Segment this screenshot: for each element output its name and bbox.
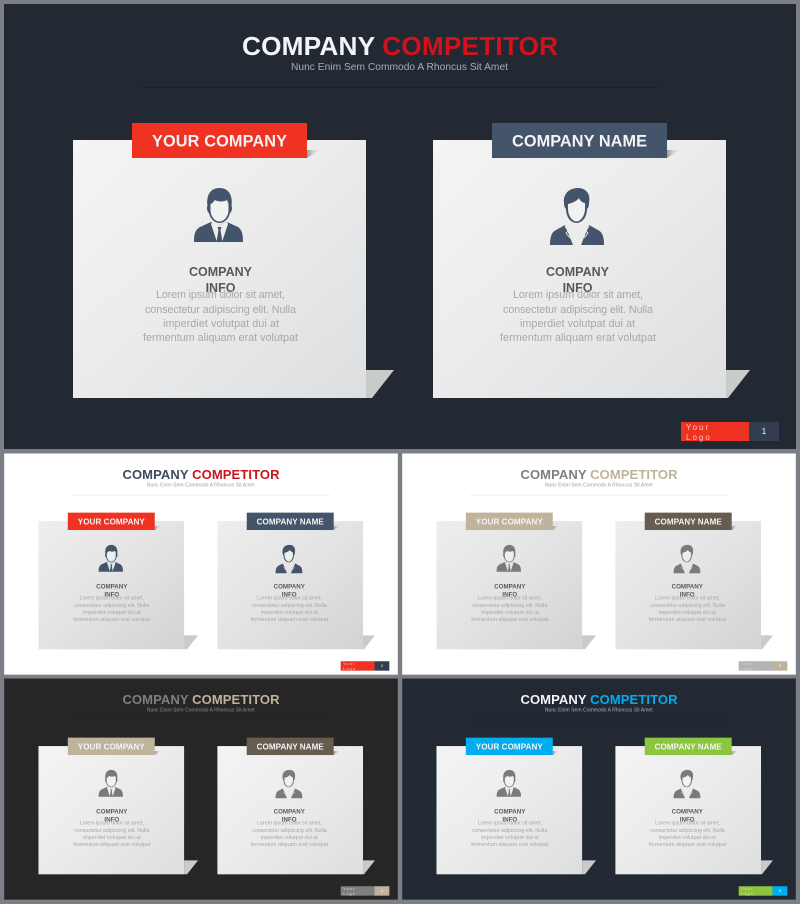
heading: company info: INFO [282, 817, 297, 824]
body text: consectetur adipiscing elit. Nulla [650, 603, 725, 609]
subtitle: Nunc Enim Sem Commodo A Rhoncus Sit Amet [291, 62, 508, 73]
footer: logo and page number: Logo [686, 433, 712, 442]
body text: imperdiet volutpat dui at [659, 835, 716, 841]
subtitle: Nunc Enim Sem Commodo A Rhoncus Sit Amet [147, 707, 255, 713]
body text: imperdiet volutpat dui at [481, 610, 539, 616]
footer: logo and page number [681, 422, 779, 442]
body text: Lorem ipsum dolor sit amet, [478, 596, 542, 602]
body text: Lorem ipsum dolor sit amet, [80, 821, 144, 827]
slide: black tan and brown [4, 678, 398, 900]
panel: company name [615, 738, 773, 874]
body text: imperdiet volutpat dui at [481, 835, 539, 841]
heading: company info: INFO [563, 281, 593, 295]
panel: your company [436, 738, 596, 874]
heading: company info: COMPANY [96, 809, 128, 816]
panel: your company [73, 123, 394, 398]
slide: white tan and brown [402, 453, 796, 675]
heading: company info: COMPANY [274, 584, 306, 591]
icon: person in jacket [276, 545, 302, 573]
tag: your company: YOUR COMPANY [78, 517, 145, 526]
panel: company name [615, 513, 773, 649]
footer: logo and page number: Your [686, 423, 710, 432]
icon: man with tie [99, 545, 123, 572]
icon: man with tie [497, 770, 521, 797]
body text: fermentum aliquam erat volutpat [471, 617, 549, 623]
body text: fermentum aliquam erat volutpat [471, 842, 549, 848]
title: COMPANY COMPETITOR [520, 692, 678, 707]
icon: person in jacket [276, 770, 302, 798]
body text: imperdiet volutpat dui at [261, 835, 318, 841]
heading: company info: INFO [680, 592, 695, 599]
footer: logo and page number: Your [343, 886, 355, 891]
tag: company name: COMPANY NAME [257, 742, 324, 751]
tag: your company [466, 513, 553, 530]
panel: company name [433, 123, 750, 398]
tag: company name: COMPANY NAME [655, 742, 722, 751]
body text: Lorem ipsum dolor sit amet, [80, 596, 144, 602]
footer: logo and page number: 5 [779, 888, 782, 893]
body text: Lorem ipsum dolor sit amet, [655, 596, 720, 602]
tag: company name: COMPANY NAME [512, 132, 647, 150]
footer: logo and page number: Your [741, 886, 753, 891]
footer: logo and page number: 1 [762, 427, 767, 436]
title: COMPANY COMPETITOR [122, 692, 280, 707]
heading: company info: INFO [502, 592, 517, 599]
footer: logo and page number: Logo [343, 666, 356, 671]
heading: company info: COMPANY [189, 265, 253, 279]
tag: company name [645, 513, 732, 530]
footer: logo and page number: Logo [343, 891, 356, 896]
body text: consectetur adipiscing elit. Nulla [252, 828, 327, 834]
footer: logo and page number: Your [343, 661, 355, 666]
subtitle: Nunc Enim Sem Commodo A Rhoncus Sit Amet [147, 482, 255, 488]
body text: fermentum aliquam erat volutpat [500, 332, 656, 344]
body text: fermentum aliquam erat volutpat [143, 332, 298, 344]
slide: dark main [4, 4, 796, 449]
heading: company info: INFO [502, 817, 517, 824]
footer: logo and page number: 2 [381, 663, 383, 668]
tag: company name: COMPANY NAME [655, 517, 722, 526]
icon: man with tie [497, 545, 521, 572]
tag: your company [132, 123, 307, 158]
footer: logo and page number: Logo [741, 666, 754, 671]
title: COMPANY COMPETITOR [242, 31, 558, 61]
tag: company name [492, 123, 667, 158]
body text: imperdiet volutpat dui at [261, 610, 318, 616]
panel: your company [38, 738, 198, 874]
tag: company name [247, 513, 334, 530]
body text: Lorem ipsum dolor sit amet, [655, 821, 720, 827]
heading: company info: COMPANY [546, 265, 610, 279]
body text: consectetur adipiscing elit. Nulla [472, 828, 547, 834]
body text: fermentum aliquam erat volutpat [251, 842, 329, 848]
icon: man with tie [99, 770, 123, 797]
footer: logo and page number: Logo [741, 891, 754, 896]
body text: consectetur adipiscing elit. Nulla [472, 603, 547, 609]
heading: company info: COMPANY [274, 809, 306, 816]
body text: consectetur adipiscing elit. Nulla [145, 304, 296, 316]
icon: man with tie [194, 188, 243, 242]
body text: imperdiet volutpat dui at [83, 835, 141, 841]
tag: company name [645, 738, 732, 755]
title: COMPANY COMPETITOR [520, 467, 678, 482]
body text: imperdiet volutpat dui at [163, 318, 279, 330]
body text: consectetur adipiscing elit. Nulla [74, 828, 149, 834]
body text: fermentum aliquam erat volutpat [649, 617, 727, 623]
tag: company name [247, 738, 334, 755]
subtitle: Nunc Enim Sem Commodo A Rhoncus Sit Amet [545, 707, 653, 713]
footer: logo and page number [341, 886, 389, 896]
body text: Lorem ipsum dolor sit amet, [257, 596, 322, 602]
body text: fermentum aliquam erat volutpat [73, 617, 151, 623]
heading: company info: COMPANY [494, 809, 526, 816]
footer: logo and page number: 3 [779, 663, 782, 668]
icon: person in jacket [674, 770, 700, 798]
tag: your company: YOUR COMPANY [476, 742, 543, 751]
heading: company info: INFO [206, 281, 236, 295]
tag: your company: YOUR COMPANY [476, 517, 543, 526]
heading: company info: INFO [104, 817, 119, 824]
slide: white red and navy [4, 453, 398, 675]
subtitle: Nunc Enim Sem Commodo A Rhoncus Sit Amet [545, 482, 653, 488]
footer: logo and page number: 4 [381, 888, 384, 893]
title: COMPANY COMPETITOR [122, 467, 280, 482]
footer: logo and page number: Your [741, 661, 753, 666]
footer: logo and page number [341, 661, 389, 671]
body text: Lorem ipsum dolor sit amet, [156, 289, 285, 301]
body text: Lorem ipsum dolor sit amet, [478, 821, 542, 827]
body text: imperdiet volutpat dui at [520, 318, 635, 330]
footer: logo and page number [739, 661, 787, 671]
body text: consectetur adipiscing elit. Nulla [650, 828, 725, 834]
tag: your company: YOUR COMPANY [152, 132, 287, 150]
heading: company info: INFO [282, 592, 297, 599]
body text: consectetur adipiscing elit. Nulla [252, 603, 327, 609]
body text: imperdiet volutpat dui at [83, 610, 141, 616]
heading: company info: COMPANY [672, 584, 704, 591]
tag: your company [68, 513, 155, 530]
panel: your company [436, 513, 596, 649]
tag: your company [68, 738, 155, 755]
tag: your company [466, 738, 553, 755]
body text: consectetur adipiscing elit. Nulla [503, 304, 653, 316]
panel: company name [217, 738, 375, 874]
body text: Lorem ipsum dolor sit amet, [257, 821, 322, 827]
icon: person in jacket [674, 545, 700, 573]
icon: person in jacket [550, 188, 604, 245]
body text: consectetur adipiscing elit. Nulla [74, 603, 149, 609]
panel: company name [217, 513, 375, 649]
body text: fermentum aliquam erat volutpat [73, 842, 151, 848]
tag: your company: YOUR COMPANY [78, 742, 145, 751]
slide: navy blue and green [402, 678, 796, 900]
tag: company name: COMPANY NAME [257, 517, 324, 526]
panel: your company [38, 513, 198, 649]
heading: company info: INFO [680, 817, 695, 824]
heading: company info: COMPANY [494, 584, 526, 591]
body text: Lorem ipsum dolor sit amet, [513, 289, 643, 301]
body text: fermentum aliquam erat volutpat [251, 617, 329, 623]
heading: company info: COMPANY [672, 809, 704, 816]
heading: company info: INFO [104, 592, 119, 599]
footer: logo and page number [739, 886, 787, 896]
body text: fermentum aliquam erat volutpat [649, 842, 727, 848]
body text: imperdiet volutpat dui at [659, 610, 716, 616]
heading: company info: COMPANY [96, 584, 128, 591]
